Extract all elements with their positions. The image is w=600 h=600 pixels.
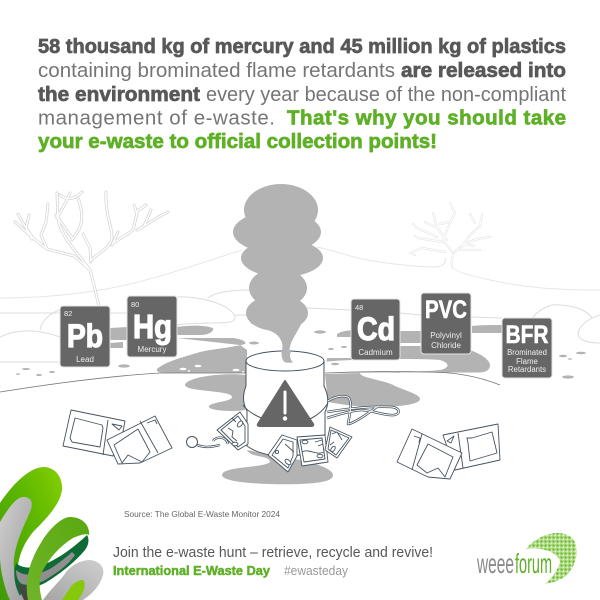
weeeforum logo: weee bbox=[476, 548, 514, 579]
toxic barrel bbox=[243, 351, 328, 456]
campaign tagline: Join the e-waste hunt – retrieve, recycle and revive! bbox=[113, 544, 433, 561]
element card: Cd Cadmium bbox=[351, 299, 400, 360]
element card: Pb Lead: 82 bbox=[64, 309, 72, 318]
hashtag: #ewasteday bbox=[284, 563, 348, 578]
event name: International E-Waste Day bbox=[113, 563, 271, 578]
headline text: are released into bbox=[401, 59, 566, 82]
compound card: BFR: Retardants bbox=[508, 365, 546, 374]
compound card: BFR: BFR bbox=[506, 321, 548, 349]
compound card: PVC bbox=[421, 293, 471, 354]
element card: Hg Mercury: Mercury bbox=[138, 345, 166, 354]
headline text bbox=[38, 35, 566, 153]
element card: Pb Lead: Lead bbox=[76, 355, 94, 364]
tangled cable right bbox=[327, 396, 399, 424]
source note: Source: The Global E-Waste Monitor 2024 bbox=[124, 509, 280, 519]
element card: Cd Cadmium: 48 bbox=[355, 303, 363, 312]
weeeforum logo bbox=[476, 533, 577, 584]
ground specks bbox=[16, 330, 586, 379]
warning triangle icon bbox=[258, 381, 313, 426]
compound card: BFR: Flame bbox=[516, 357, 538, 366]
e-waste day swirl logo bbox=[0, 467, 103, 600]
pool highlights bbox=[180, 359, 448, 373]
smoke wisp inside barrel bbox=[281, 350, 293, 363]
dead tree left bbox=[15, 192, 168, 306]
headline text: the environment bbox=[38, 83, 200, 106]
element card: Cd Cadmium: Cadmium bbox=[358, 348, 393, 357]
cable with plug left bbox=[186, 436, 228, 448]
compound card: PVC: Polyvinyl bbox=[430, 331, 462, 340]
element card: Hg Mercury bbox=[127, 296, 177, 357]
smoke plume bbox=[233, 184, 323, 362]
discarded microwave right bbox=[397, 424, 500, 479]
headline text: your e-waste to official collection points! bbox=[38, 130, 437, 153]
compound card: PVC: PVC bbox=[425, 296, 467, 324]
headline text: management of e-waste. bbox=[38, 106, 275, 130]
landscape outlines bbox=[0, 247, 600, 362]
discarded microwave left bbox=[63, 410, 172, 464]
compound card: PVC: Chloride bbox=[431, 341, 461, 350]
headline text: That's why you should take bbox=[287, 106, 566, 130]
element card: Cd Cadmium: Cd bbox=[357, 311, 395, 347]
circuit boards bbox=[217, 412, 352, 472]
compound card: BFR: Brominated bbox=[507, 348, 547, 357]
element card: Hg Mercury: 80 bbox=[131, 300, 139, 309]
dead tree right bbox=[410, 203, 490, 267]
toxic pools bbox=[110, 325, 503, 484]
headline text: every year because of the non-compliant bbox=[206, 83, 566, 106]
headline text: 58 thousand kg of mercury and 45 million kg of plastics bbox=[38, 35, 566, 58]
element card: Pb Lead: Pb bbox=[67, 318, 103, 354]
weeeforum logo: forum bbox=[515, 548, 552, 579]
headline text: containing brominated flame retardants bbox=[38, 59, 395, 82]
element card: Hg Mercury: Hg bbox=[133, 308, 172, 345]
compound card: BFR bbox=[502, 318, 552, 378]
element card: Pb Lead bbox=[60, 306, 110, 367]
horizon lines bbox=[0, 372, 500, 392]
